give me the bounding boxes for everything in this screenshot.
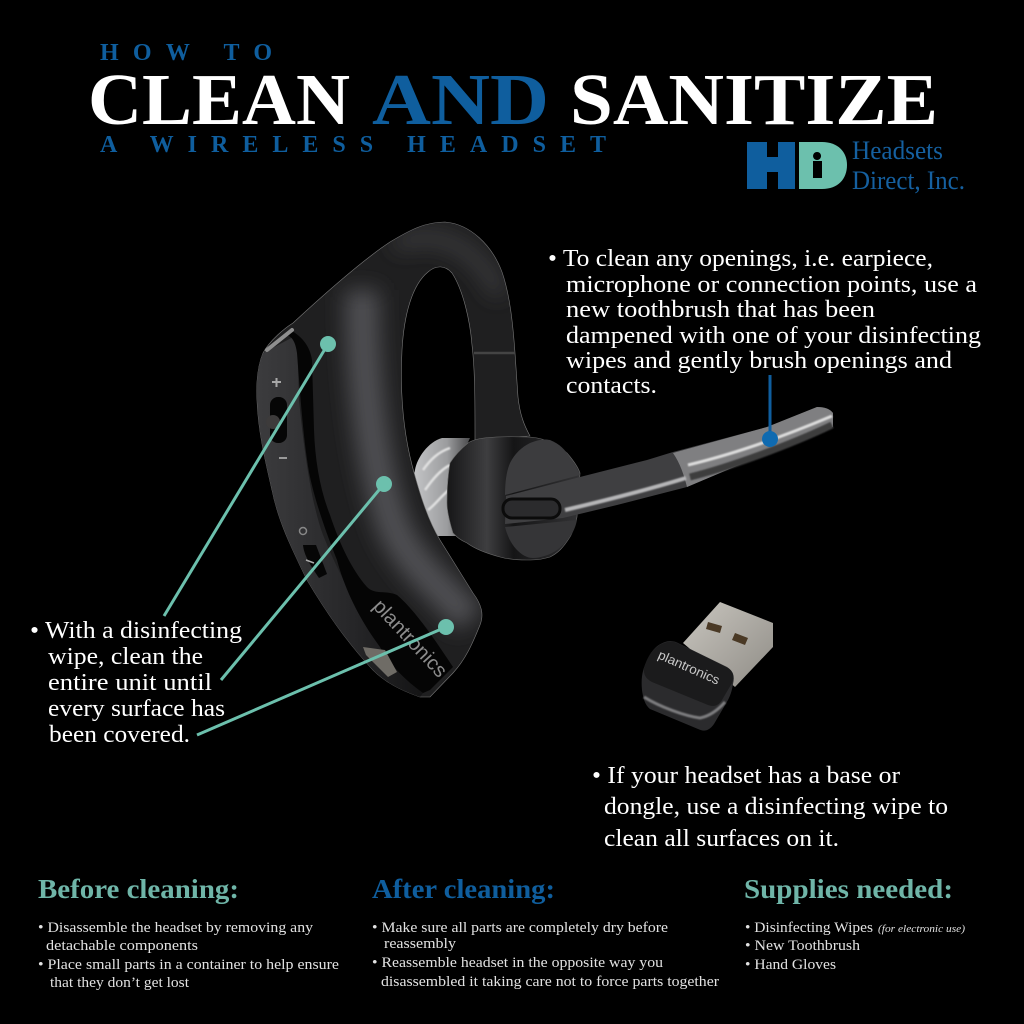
logo: Headsets Direct, Inc. xyxy=(747,136,965,195)
supplies list: (for electronic use) xyxy=(878,923,965,935)
dongle light stripe xyxy=(644,697,725,718)
before cleaning list: detachable components xyxy=(46,938,198,954)
after cleaning list: reassembly xyxy=(384,936,457,952)
leader: top of unit xyxy=(164,336,336,616)
logo i xyxy=(813,152,822,178)
callout: disinfecting wipe: entire unit until xyxy=(48,670,212,696)
before cleaning list: • Disassemble the headset by removing any xyxy=(38,920,314,936)
brand name on headset: plantronics xyxy=(368,595,451,682)
body highlights xyxy=(362,238,500,620)
supplies list xyxy=(745,920,965,973)
boom front highlight xyxy=(565,478,686,510)
callout: openings: contacts. xyxy=(566,373,657,399)
silicone ear tip xyxy=(413,438,470,536)
boom switch slot xyxy=(503,499,560,518)
callout: openings: wipes and gently brush openings and xyxy=(566,348,952,374)
logo mark D xyxy=(799,142,847,189)
leader: boom xyxy=(762,375,778,447)
leader: bottom of unit xyxy=(197,619,454,735)
callout: disinfecting wipe: • With a disinfecting xyxy=(30,618,242,644)
dongle brand name: plantronics xyxy=(656,647,723,688)
callout: disinfecting wipe: every surface has xyxy=(48,696,225,722)
before cleaning list: that they don’t get lost xyxy=(50,975,189,991)
callout: openings: new toothbrush that has been xyxy=(566,297,875,323)
logo mark H xyxy=(747,142,795,189)
after cleaning list: disassembled it taking care not to force parts together xyxy=(381,974,719,990)
earpiece housing xyxy=(447,437,580,560)
heading: clean and sanitize: CLEAN xyxy=(88,59,350,140)
leader lines xyxy=(164,336,778,735)
main body and ear hook xyxy=(257,222,530,697)
supplies list: • New Toothbrush xyxy=(745,938,861,954)
boom groove xyxy=(690,425,832,477)
volume controls xyxy=(266,378,287,458)
panel: supplies needed xyxy=(744,874,965,973)
heading: clean and sanitize: SANITIZE xyxy=(570,59,938,140)
headset illustration xyxy=(257,222,833,697)
heading: supplies needed: Supplies needed: xyxy=(744,874,953,904)
callout: disinfecting wipe: wipe, clean the xyxy=(48,644,203,670)
callout: openings: • To clean any openings, i.e. earpiece, xyxy=(548,246,933,272)
boom highlight xyxy=(688,416,832,465)
after cleaning list: • Reassemble headset in the opposite way you xyxy=(372,955,663,971)
before cleaning list xyxy=(38,920,339,991)
callout: openings: microphone or connection points, use a xyxy=(566,272,977,298)
black glossy strip xyxy=(285,330,453,693)
callout: base or dongle: clean all surfaces on it. xyxy=(604,826,839,852)
dongle top face xyxy=(644,642,733,706)
after cleaning list: • Make sure all parts are completely dry before xyxy=(372,920,668,936)
leader: middle of unit xyxy=(221,476,392,680)
heading: how to: HOW TO xyxy=(100,40,272,66)
title xyxy=(88,40,938,158)
boom silver end xyxy=(673,407,833,487)
callout: openings xyxy=(548,246,981,399)
side control panel xyxy=(257,335,423,697)
heading: clean and sanitize: AND xyxy=(372,59,549,140)
panel: before cleaning xyxy=(38,874,339,991)
heading: after cleaning: After cleaning: xyxy=(372,874,555,904)
housing lower disc xyxy=(505,520,577,558)
dongle cap body xyxy=(642,641,734,731)
housing upper disc xyxy=(505,439,580,495)
silver corner xyxy=(267,330,292,350)
callout: disinfecting wipe: been covered. xyxy=(49,722,190,748)
heading: before cleaning: Before cleaning: xyxy=(38,874,239,904)
callout: base or dongle xyxy=(592,763,948,852)
supplies list: • Hand Gloves xyxy=(745,957,836,973)
power switch xyxy=(300,528,327,578)
charging port xyxy=(363,647,397,677)
supplies list: • Disinfecting Wipes xyxy=(745,920,873,936)
usb dongle xyxy=(642,602,773,731)
microphone boom xyxy=(503,407,833,524)
callout: openings: dampened with one of your disinfecting xyxy=(566,323,981,349)
callout: disinfecting wipe xyxy=(30,618,242,748)
heading: a wireless headset: A WIRELESS HEADSET xyxy=(100,132,606,158)
callout: base or dongle: • If your headset has a base or xyxy=(592,763,900,789)
panel: after cleaning xyxy=(372,874,719,990)
before cleaning list: • Place small parts in a container to help ensure xyxy=(38,957,339,973)
usb metal connector xyxy=(683,602,773,687)
after cleaning list xyxy=(372,920,719,990)
heading: clean and sanitize xyxy=(88,59,938,140)
boom base xyxy=(505,407,833,524)
callout: base or dongle: dongle, use a disinfecting wipe to xyxy=(604,794,948,820)
ear hook band xyxy=(474,352,515,354)
logo: Headsets Direct, Inc.: Direct, Inc. xyxy=(852,166,965,195)
usb contacts xyxy=(706,622,748,645)
logo text: Headsets xyxy=(852,136,943,165)
